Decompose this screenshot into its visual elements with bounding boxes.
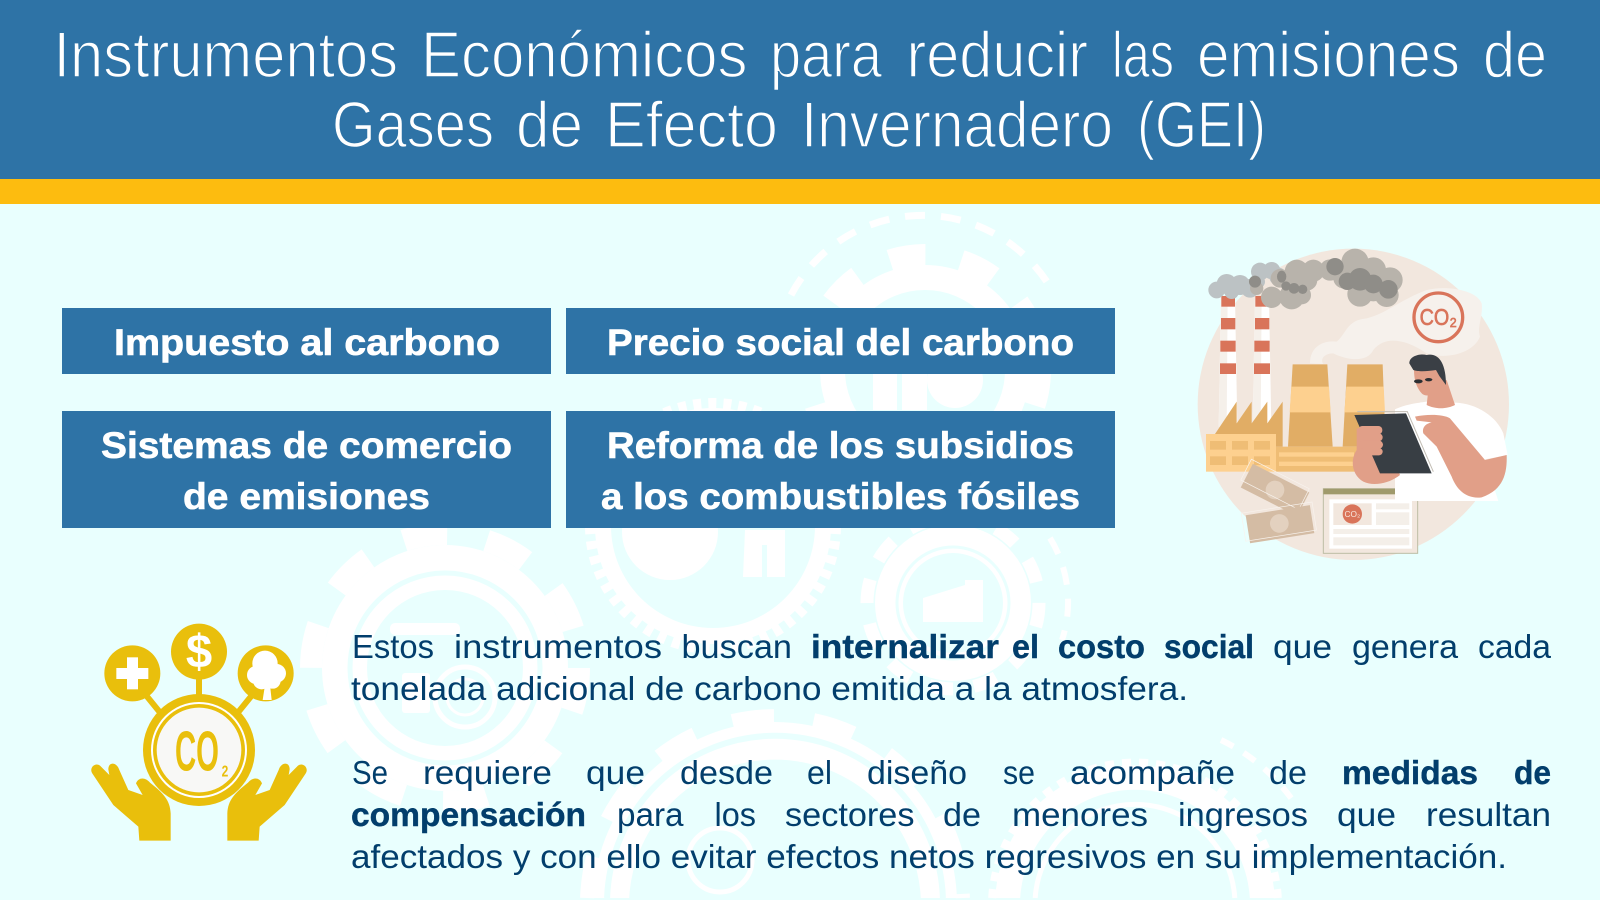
paragraph 1: que [1273,629,1332,666]
paragraph 2: afectados y con ello evitar efectos netos regresivos en su implementación. [351,839,1507,876]
smoke plume [1310,288,1482,364]
icon: tree [238,645,294,701]
paragraph 2: compensación [351,797,586,834]
box: Sistemas de comercio de emisiones: Sistemas de comercio [101,425,512,466]
paragraph 1: genera [1352,629,1458,666]
paragraph 2: de [1514,755,1551,792]
paragraph 2: menores [1012,797,1148,834]
paragraph 2: que [586,755,645,792]
paragraph 2: medidas [1342,755,1478,792]
paragraph 2: requiere [423,755,552,792]
CO2 badge [1414,293,1463,342]
title: de [516,88,583,161]
box: Sistemas de comercio de emisiones: de emisiones [183,476,430,517]
box: Reforma de los subsidios [566,411,1115,528]
paragraph 1: cada [1478,629,1551,666]
paragraph 1: instrumentos [454,629,662,666]
box: Sistemas de comercio de emisiones [62,411,551,528]
title [54,18,1547,161]
icon: right hand [227,764,307,841]
CO2 badge: CO₂ [1420,304,1457,330]
box: Impuesto al carbono [62,308,551,374]
paragraph 1: internalizar [811,629,999,666]
title: para [770,18,883,91]
box: Precio social del carbono: Precio social del carbono [607,322,1074,363]
box: Precio social del carbono [566,308,1115,374]
icon: dollar [171,624,227,680]
paragraph 1: costo [1058,629,1145,666]
paragraph 2: de [1269,755,1307,792]
icon: left hand [91,764,171,841]
illustration: factory and man with tablet [1198,249,1509,560]
paragraph 2: se [1003,755,1035,792]
paragraph 2: Se [352,755,388,792]
factory building [1206,402,1360,472]
title: Económicos [421,18,748,91]
header band [0,0,1600,179]
connectors [145,678,253,712]
man [1353,355,1508,501]
title: (GEI) [1137,88,1266,161]
title: las [1112,18,1174,91]
smoke clouds [1208,249,1403,309]
title: Efecto [605,88,778,161]
box: Reforma de los subsidios: a los combustibles fósiles [601,476,1080,517]
paragraph 1: social [1164,629,1254,666]
paragraph 2: que [1337,797,1396,834]
yellow stripe [0,179,1600,204]
icon: CO2 with hands [91,624,307,841]
paragraph 2 [351,755,1551,876]
paragraph 2: los [714,797,756,834]
paragraph 1: el [1012,629,1039,666]
CO2 medallion [143,694,255,806]
banknotes [1238,459,1317,544]
paragraph 2: de [943,797,981,834]
paragraph 1: buscan [682,629,792,666]
title: Invernadero [801,88,1113,161]
box: Impuesto al carbono: Impuesto al carbono [114,322,500,363]
cooling towers [1288,364,1386,447]
paragraph 2: el [807,755,832,792]
icon: health plus [104,645,160,701]
paragraph 1: Estos [352,629,434,666]
CO2 medallion: 2 [222,764,228,781]
paragraph 2: para [617,797,684,834]
box: Reforma de los subsidios: Reforma de los subsidios [607,425,1074,466]
paragraph 2: ingresos [1178,797,1308,834]
paragraph 1: tonelada adicional de carbono emitida a la atmosfera. [351,671,1188,708]
paragraph 1 [351,629,1551,708]
background gears watermark [311,215,1310,898]
paragraph 2: resultan [1426,797,1551,834]
web window [1323,489,1418,553]
icon: dollar: $ [186,625,212,678]
CO2 medallion: CO [175,721,219,784]
paragraph 2: diseño [867,755,967,792]
paragraph 2: acompañe [1070,755,1235,792]
title: Gases [332,88,494,161]
paragraph 2: sectores [785,797,914,834]
title: Instrumentos [54,18,398,91]
title: reducir [906,18,1088,91]
title: emisiones [1197,18,1460,91]
paragraph 2: desde [680,755,773,792]
web window: CO₂ [1344,509,1360,519]
chimneys [1219,296,1271,427]
title: de [1483,18,1547,91]
